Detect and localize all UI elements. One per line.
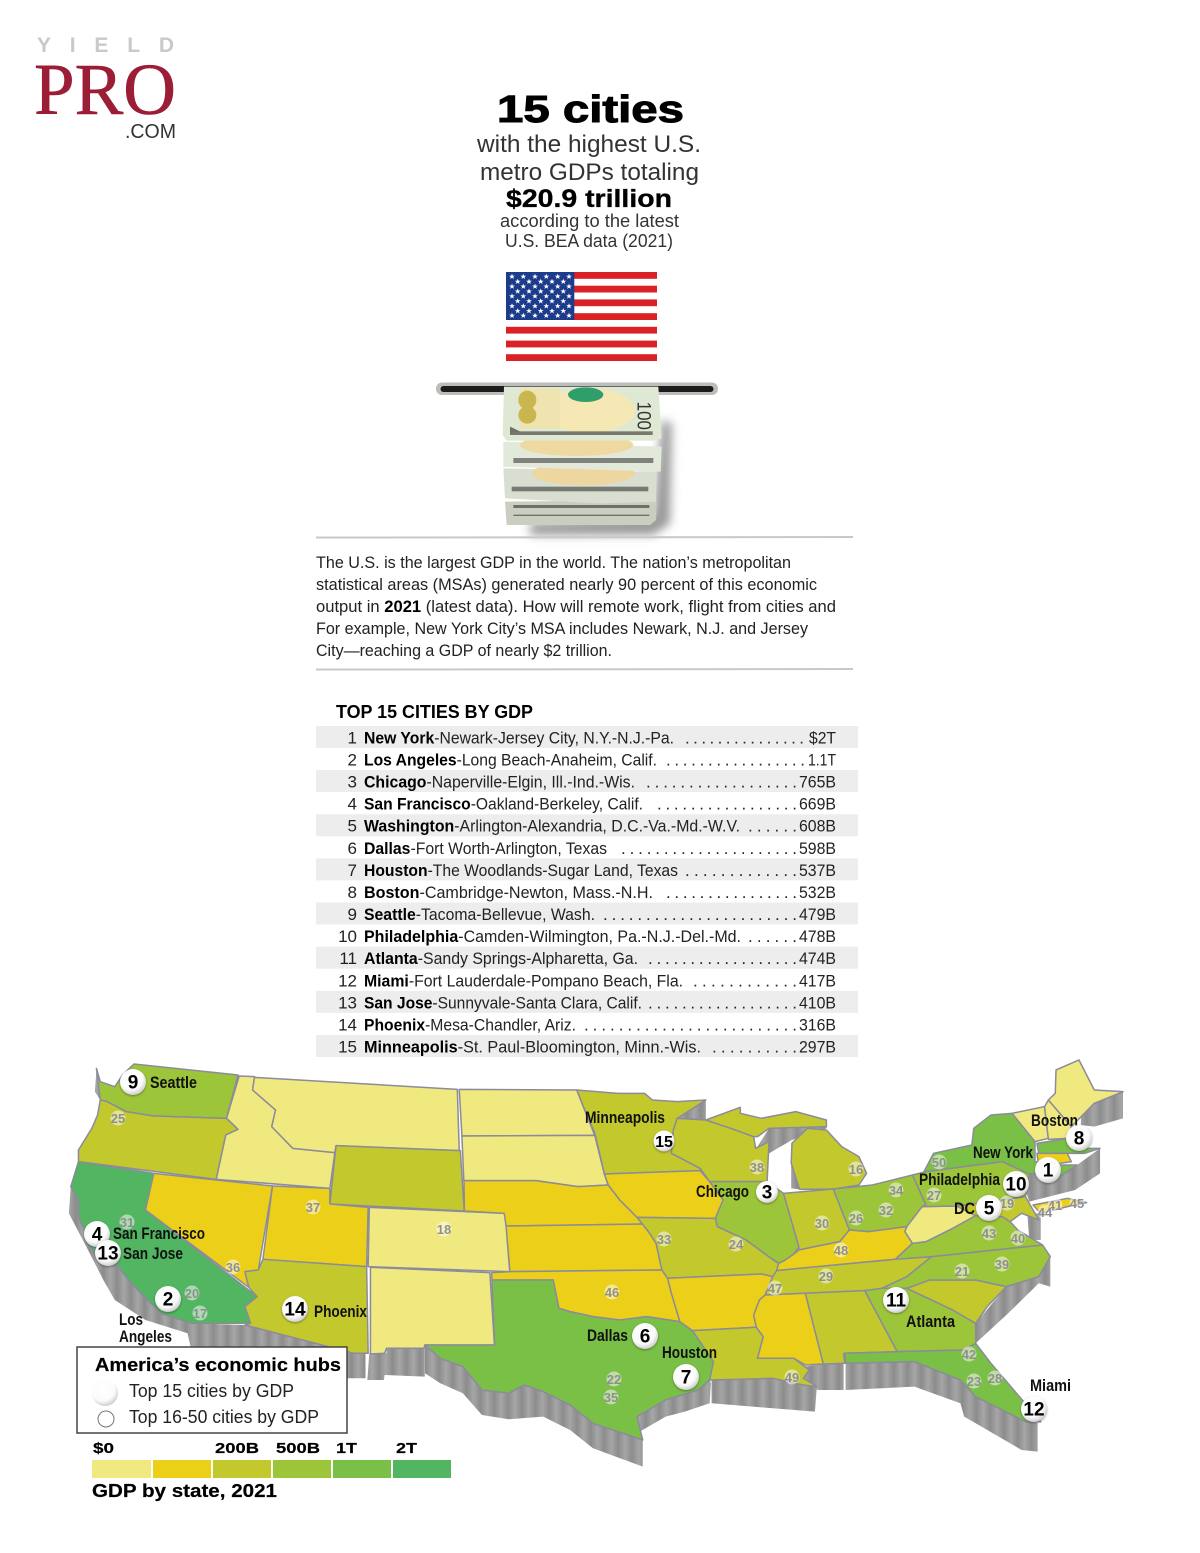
New Mexico <box>370 1267 494 1354</box>
table: top 15 cities by GDP: 4 <box>348 795 357 814</box>
city labels: San Francisco <box>113 1224 205 1243</box>
city labels: Philadelphia <box>919 1170 1000 1189</box>
table heading: TOP 15 CITIES BY GDP <box>336 702 533 722</box>
icon: American flag <box>506 272 657 361</box>
small markers: cities ranked 16-50: 32 <box>879 1203 893 1218</box>
subtitle block <box>476 131 701 251</box>
table: top 15 cities by GDP: 765B <box>799 772 836 792</box>
small markers: cities ranked 16-50 <box>110 1110 1084 1405</box>
Massachusetts <box>1037 1138 1100 1153</box>
Wyoming <box>330 1146 464 1211</box>
city labels: Los <box>119 1310 143 1329</box>
subtitle block: metro GDPs totaling <box>480 159 699 186</box>
table: top 15 cities by GDP: ................. <box>657 795 797 814</box>
table: top 15 cities by GDP: ...... <box>748 927 797 946</box>
color scale labels: 1T <box>336 1440 357 1457</box>
Kansas <box>506 1224 662 1272</box>
table: top 15 cities by GDP: Houston-The Woodlands-Sugar Land, Texas <box>364 861 678 880</box>
Delaware and New Jersey coast <box>1033 1198 1087 1213</box>
small markers: cities ranked 16-50: 17 <box>193 1306 207 1321</box>
icon: stack of dollar bills: 100 <box>633 402 654 430</box>
small markers: cities ranked 16-50: 50 <box>932 1155 946 1170</box>
small markers: cities ranked 16-50: 21 <box>955 1264 969 1279</box>
city labels: New York <box>973 1143 1033 1162</box>
table: top 15 cities by GDP: 478B <box>799 927 836 946</box>
legend box: America's economic hubs: America’s economic hubs <box>95 1355 341 1375</box>
map: U.S. states by GDP <box>69 1060 1123 1467</box>
table: top 15 cities by GDP: New York-Newark-Jersey City, N.Y.-N.J.-Pa. <box>364 728 674 748</box>
table: top 15 cities by GDP: 7 <box>348 861 357 880</box>
city labels: Houston <box>662 1343 717 1362</box>
small markers: cities ranked 16-50: 20 <box>185 1286 199 1301</box>
Alabama <box>805 1291 897 1364</box>
divider bottom <box>316 668 853 670</box>
table: top 15 cities by GDP: 6 <box>348 839 357 858</box>
table: top 15 cities by GDP: 598B <box>799 839 836 858</box>
small markers: cities ranked 16-50: 24 <box>729 1237 744 1252</box>
small markers: cities ranked 16-50: 37 <box>306 1200 320 1215</box>
North Dakota <box>459 1089 595 1136</box>
intro paragraph: output in 2021 (latest data). How will remote work, flight from cities and <box>316 598 836 616</box>
table: top 15 cities by GDP: 11 <box>339 949 357 968</box>
small markers: cities ranked 16-50: 27 <box>927 1188 941 1203</box>
small markers: cities ranked 16-50: 38 <box>750 1160 764 1175</box>
table: top 15 cities by GDP: 417B <box>799 971 836 990</box>
Illinois <box>710 1182 799 1263</box>
table: top 15 cities by GDP: ....................... <box>603 905 797 924</box>
table: top 15 cities by GDP: ......................... <box>584 1016 797 1034</box>
table: top 15 cities by GDP: Seattle-Tacoma-Bellevue, Wash. <box>364 905 595 924</box>
legend box: America's economic hubs: Top 15 cities by GDP <box>129 1381 294 1401</box>
table: top 15 cities by GDP: 14 <box>338 1016 357 1034</box>
intro paragraph: For example, New York City’s MSA includes Newark, N.J. and Jersey <box>316 620 809 638</box>
table: top 15 cities by GDP: .................. <box>646 772 797 792</box>
table: top 15 cities by GDP: 1.1T <box>808 750 836 770</box>
small markers: cities ranked 16-50: 47 <box>768 1281 782 1296</box>
pins: top 15 cities: 7 <box>681 1368 691 1388</box>
small markers: cities ranked 16-50: 49 <box>785 1370 799 1385</box>
table: top 15 cities by GDP: .................. <box>648 993 797 1012</box>
table: top 15 cities by GDP: 10 <box>338 927 357 946</box>
Florida <box>845 1343 1041 1422</box>
small markers: cities ranked 16-50: 44 <box>1038 1205 1053 1220</box>
intro paragraph <box>316 554 836 660</box>
Missouri <box>637 1217 779 1278</box>
color scale labels: 200B <box>215 1440 259 1457</box>
table: top 15 cities by GDP: Miami-Fort Lauderdale-Pompano Beach, Fla. <box>364 971 683 990</box>
color scale bar <box>92 1460 451 1478</box>
table: top 15 cities by GDP: Phoenix-Mesa-Chandler, Ariz. <box>364 1016 576 1034</box>
Michigan upper <box>706 1107 826 1137</box>
pins: top 15 cities: 11 <box>886 1290 906 1312</box>
Indiana <box>784 1189 849 1250</box>
color scale labels <box>93 1440 417 1457</box>
table: top 15 cities by GDP: .................. <box>648 949 797 968</box>
small markers: cities ranked 16-50: 45 <box>1070 1196 1084 1211</box>
table: top 15 cities by GDP: Philadelphia-Camden-Wilmington, Pa.-N.J.-Del.-Md. <box>364 927 741 946</box>
pins: top 15 cities: 3 <box>762 1182 772 1204</box>
small markers: cities ranked 16-50: 40 <box>1011 1231 1025 1246</box>
table: top 15 cities by GDP: 532B <box>799 883 836 902</box>
small markers: cities ranked 16-50: 30 <box>815 1216 829 1231</box>
South Carolina <box>907 1280 1006 1323</box>
Louisiana <box>692 1327 817 1387</box>
small markers: cities ranked 16-50: 43 <box>982 1226 996 1241</box>
Oklahoma <box>492 1270 680 1322</box>
table: top 15 cities by GDP: San Francisco-Oakland-Berkeley, Calif. <box>364 795 643 814</box>
Montana <box>253 1077 459 1153</box>
states: east <box>425 1060 1123 1440</box>
pins: top 15 cities: 1 <box>1043 1160 1054 1182</box>
table: top 15 cities by GDP: 669B <box>799 795 836 814</box>
table: top 15 cities by GDP: 8 <box>348 883 357 902</box>
table: top 15 cities by GDP: ................. <box>666 750 805 770</box>
North Carolina <box>882 1245 1050 1288</box>
table: top 15 cities by GDP: Atlanta-Sandy Springs-Alpharetta, Ga. <box>364 949 638 968</box>
city labels <box>113 1073 1078 1395</box>
Nevada <box>145 1173 272 1287</box>
table: top 15 cities by GDP: 410B <box>799 993 836 1012</box>
small markers: cities ranked 16-50: 36 <box>226 1260 240 1275</box>
Mississippi <box>754 1293 823 1365</box>
Michigan lower <box>791 1128 867 1189</box>
table: top 15 cities by GDP: 1 <box>348 728 357 748</box>
logo: Yield Pro: .COM <box>125 121 176 143</box>
table: top 15 cities by GDP: ............... <box>685 728 804 748</box>
table: top 15 cities by GDP: 474B <box>799 949 836 968</box>
small markers: cities ranked 16-50: 35 <box>604 1390 618 1405</box>
Texas <box>425 1280 714 1440</box>
city labels: Angeles <box>119 1327 172 1346</box>
small markers: cities ranked 16-50: 22 <box>607 1372 621 1387</box>
table: top 15 cities by GDP: 13 <box>338 993 357 1012</box>
table: top 15 cities by GDP: Washington-Arlington-Alexandria, D.C.-Va.-Md.-W.V. <box>364 817 740 836</box>
title: 15 cities: 15 cities <box>497 89 684 131</box>
small markers: cities ranked 16-50: 19 <box>1000 1196 1014 1211</box>
Ohio <box>833 1175 926 1232</box>
table: top 15 cities by GDP: .......... <box>712 1038 797 1057</box>
subtitle block: according to the latest <box>500 211 679 231</box>
Connecticut <box>1037 1150 1071 1167</box>
small markers: cities ranked 16-50: 23 <box>967 1374 981 1389</box>
table: top 15 cities by GDP: Boston-Cambridge-Newton, Mass.-N.H. <box>364 883 653 902</box>
Arizona <box>245 1259 368 1353</box>
table: top 15 cities by GDP: Dallas-Fort Worth-Arlington, Texas <box>364 839 607 858</box>
pins: top 15 cities: 14 <box>284 1300 306 1320</box>
pins: top 15 cities: 9 <box>128 1072 138 1094</box>
Utah <box>263 1186 368 1267</box>
map extrusion: west <box>69 1070 425 1380</box>
Washington <box>96 1064 238 1118</box>
intro paragraph: statistical areas (MSAs) generated nearly 90 percent of this economic <box>316 576 817 594</box>
table: top 15 cities by GDP: 297B <box>799 1038 836 1057</box>
small markers: cities ranked 16-50: 18 <box>437 1222 451 1237</box>
Iowa <box>604 1171 723 1218</box>
subtitle block: U.S. BEA data (2021) <box>505 231 673 251</box>
table: top 15 cities by GDP: 15 <box>338 1038 357 1057</box>
Pennsylvania <box>913 1162 1029 1207</box>
table: top 15 cities by GDP <box>316 726 858 1057</box>
table: top 15 cities by GDP: 9 <box>348 905 357 924</box>
table: top 15 cities by GDP: ...... <box>748 817 797 836</box>
Georgia <box>865 1288 976 1352</box>
city labels: Atlanta <box>906 1312 955 1331</box>
small markers: cities ranked 16-50: 16 <box>849 1162 863 1177</box>
color scale labels: $0 <box>93 1440 114 1457</box>
small markers: cities ranked 16-50: 33 <box>657 1232 671 1247</box>
table: top 15 cities by GDP: 316B <box>799 1016 836 1034</box>
Virginia <box>895 1216 1043 1259</box>
small markers: cities ranked 16-50: 25 <box>111 1111 125 1126</box>
table: top 15 cities by GDP: ..................... <box>621 839 797 858</box>
small markers: cities ranked 16-50: 46 <box>605 1285 619 1300</box>
Kentucky <box>777 1227 913 1271</box>
city labels: Miami <box>1030 1376 1071 1395</box>
table: top 15 cities by GDP: 608B <box>799 817 836 836</box>
Idaho <box>216 1076 335 1188</box>
table: top 15 cities by GDP: 3 <box>348 772 357 792</box>
table: top 15 cities by GDP: 5 <box>348 817 357 836</box>
small markers: cities ranked 16-50: 29 <box>819 1269 833 1284</box>
Oregon <box>78 1100 238 1179</box>
small markers: cities ranked 16-50: 39 <box>995 1257 1009 1272</box>
small markers: cities ranked 16-50: 26 <box>849 1211 863 1226</box>
California <box>71 1162 257 1323</box>
table: top 15 cities by GDP: $2T <box>809 728 836 748</box>
Colorado <box>368 1207 510 1272</box>
pins: top 15 cities: 12 <box>1023 1400 1045 1420</box>
intro paragraph: The U.S. is the largest GDP in the world. The nation’s metropolitan <box>316 554 791 572</box>
Minnesota <box>577 1090 706 1174</box>
pins: top 15 cities: 4 <box>92 1224 103 1246</box>
legend box: America's economic hubs: Top 16-50 cities by GDP <box>129 1407 319 1427</box>
divider top <box>316 536 853 538</box>
pins: top 15 cities: 8 <box>1074 1128 1084 1150</box>
Maine <box>1048 1060 1123 1127</box>
city labels: Boston <box>1031 1111 1078 1130</box>
icon: slot <box>436 382 718 395</box>
city labels: Chicago <box>696 1182 749 1201</box>
states: west <box>71 1064 608 1354</box>
small markers: cities ranked 16-50: 41 <box>1048 1198 1062 1213</box>
table: top 15 cities by GDP: Los Angeles-Long Beach-Anaheim, Calif. <box>364 750 657 770</box>
pins: top 15 cities <box>84 1069 1092 1422</box>
logo: Yield Pro: PRO <box>34 49 176 130</box>
small markers: cities ranked 16-50: 34 <box>889 1183 904 1198</box>
city labels: Minneapolis <box>585 1108 665 1127</box>
intro paragraph: City—reaching a GDP of nearly $2 trillion. <box>316 642 612 660</box>
table: top 15 cities by GDP: Chicago-Naperville-Elgin, Ill.-Ind.-Wis. <box>364 772 635 792</box>
subtitle block: with the highest U.S. <box>476 131 701 158</box>
table: top 15 cities by GDP: 479B <box>799 905 836 924</box>
color scale labels: 2T <box>396 1440 417 1457</box>
table: top 15 cities by GDP: ............ <box>693 971 797 990</box>
city labels: DC <box>954 1199 975 1218</box>
pins: top 15 cities: 6 <box>640 1326 650 1348</box>
table: top 15 cities by GDP: ............. <box>685 861 797 880</box>
South Dakota <box>462 1135 608 1187</box>
pins: top 15 cities: 13 <box>97 1244 119 1264</box>
table: top 15 cities by GDP: San Jose-Sunnyvale-Santa Clara, Calif. <box>364 993 642 1012</box>
subtitle block: $20.9 trillion <box>506 185 672 213</box>
city labels: Dallas <box>587 1326 628 1345</box>
table: top 15 cities by GDP: Minneapolis-St. Paul-Bloomington, Minn.-Wis. <box>364 1038 701 1057</box>
legend box: America's economic hubs <box>77 1347 347 1433</box>
small markers: cities ranked 16-50: 28 <box>988 1371 1002 1386</box>
color scale labels: 500B <box>276 1440 320 1457</box>
table: top 15 cities by GDP: 2 <box>348 750 357 770</box>
table: top 15 cities by GDP: ................ <box>666 883 797 902</box>
table: top 15 cities by GDP: 537B <box>799 861 836 880</box>
city labels: Phoenix <box>314 1302 367 1321</box>
small markers: cities ranked 16-50: 31 <box>120 1215 134 1230</box>
New York <box>924 1113 1077 1177</box>
West Virginia <box>905 1206 976 1243</box>
city labels: Seattle <box>150 1073 197 1092</box>
pins: top 15 cities: 10 <box>1005 1174 1027 1196</box>
city labels: San Jose <box>123 1244 183 1263</box>
pins: top 15 cities: 2 <box>163 1290 173 1310</box>
small markers: cities ranked 16-50: 48 <box>834 1243 848 1258</box>
Maryland <box>957 1197 1039 1222</box>
Arkansas <box>668 1274 773 1331</box>
pins: top 15 cities: 15 <box>655 1134 673 1151</box>
icon: stack of dollar bills <box>503 387 672 535</box>
color scale caption: GDP by state, 2021 <box>92 1481 277 1501</box>
Tennessee <box>765 1257 932 1295</box>
New Hampshire <box>1045 1100 1071 1139</box>
Nebraska <box>464 1181 642 1226</box>
Vermont <box>1012 1107 1048 1142</box>
small markers: cities ranked 16-50: 42 <box>962 1347 976 1362</box>
pins: top 15 cities: 5 <box>984 1198 995 1220</box>
map extrusion: east <box>425 1092 1123 1467</box>
table: top 15 cities by GDP: 12 <box>338 971 357 990</box>
logo: Yield Pro: YIELD <box>37 34 174 57</box>
Wisconsin <box>671 1118 769 1182</box>
